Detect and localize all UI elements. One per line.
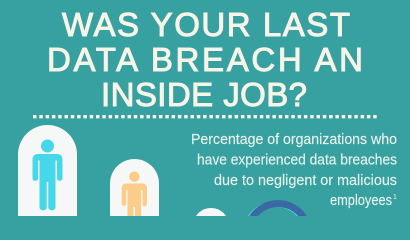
title: WAS YOUR LAST (62, 6, 350, 43)
title: DATA BREACH AN (47, 41, 363, 78)
description text (191, 131, 397, 209)
description text: 1 (393, 194, 397, 201)
description text: due to negligent or malicious (214, 172, 397, 189)
description text: have experienced data breaches (197, 152, 397, 168)
description text: employees (330, 192, 392, 209)
pictogram: small capsule (196, 208, 226, 216)
title: INSIDE JOB? (101, 76, 307, 113)
donut chart (248, 200, 307, 216)
pictogram: medium capsule with orange person (110, 159, 159, 216)
title (47, 6, 363, 113)
description text: Percentage of organizations who (191, 131, 397, 148)
pictogram: tall capsule with blue person (18, 125, 77, 216)
